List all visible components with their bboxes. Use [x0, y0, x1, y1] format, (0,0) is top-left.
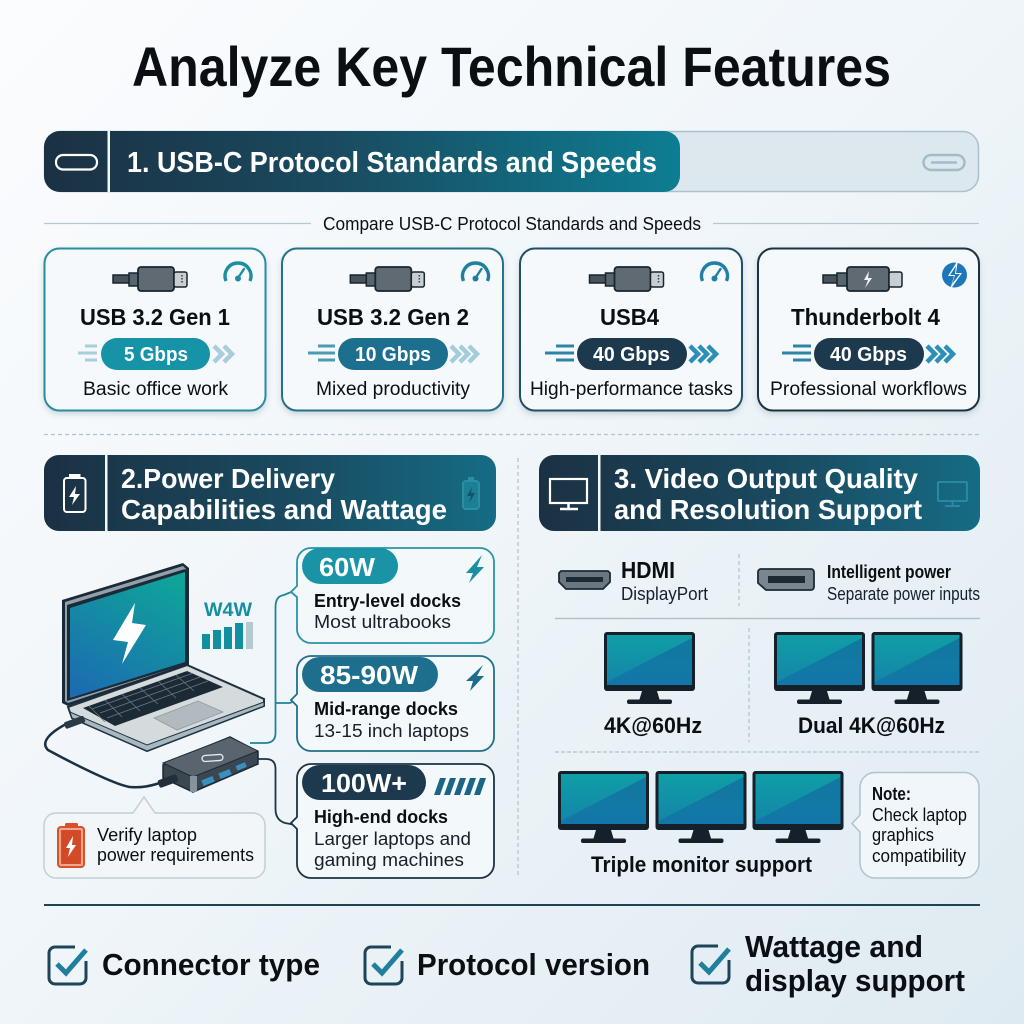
wattage text: gaming machines — [314, 850, 464, 870]
section 3 heading text: and Resolution Support — [614, 494, 922, 525]
wattage text: Most ultrabooks — [314, 612, 451, 632]
wattage card: 60W — [291, 548, 494, 643]
card title: Thunderbolt 4 — [791, 304, 940, 330]
icon: faint monitor — [938, 482, 967, 506]
wattage text: Larger laptops and — [314, 829, 471, 849]
checklist: protocol version: Protocol version — [417, 947, 650, 982]
wattage text: High-end docks — [314, 807, 448, 827]
section 3 heading text: 3. Video Output Quality — [614, 463, 918, 494]
icon: bolt — [466, 665, 484, 691]
note callout — [852, 772, 979, 878]
port row: DisplayPort — [758, 562, 980, 604]
icon: faint USB-C port — [924, 155, 964, 170]
wattage pill — [302, 765, 426, 800]
wattage card: 100W+: 100W+ — [321, 768, 407, 798]
callout text: power requirements — [97, 845, 254, 865]
dock and cable — [45, 715, 258, 792]
W4W label and signal bars: W4W — [204, 600, 252, 621]
card description: High-performance tasks — [530, 379, 733, 400]
icon: thunderbolt connector — [823, 267, 902, 291]
icon: faint battery — [463, 478, 479, 509]
HDMI label: HDMI — [621, 557, 675, 583]
display option: triple monitors: Triple monitor support — [591, 852, 813, 877]
card: USB 3.2 Gen 2 — [282, 248, 503, 410]
card description: Professional workflows — [770, 379, 967, 400]
section 1 heading text: 1. USB-C Protocol Standards and Speeds — [127, 147, 657, 179]
wattage text: Mid-range docks — [314, 699, 458, 719]
section 2 header — [44, 455, 496, 531]
card: Thunderbolt 4 — [758, 248, 979, 410]
checklist: wattage and display support: display support — [745, 963, 965, 998]
note callout: graphics — [872, 825, 934, 845]
speed pill: 40 Gbps — [593, 344, 670, 366]
speed pill — [78, 338, 232, 370]
connector lines — [250, 590, 296, 825]
icon: red battery — [58, 823, 84, 867]
laptop illustration — [62, 563, 264, 751]
card description: Mixed productivity — [316, 379, 470, 400]
note callout: Note: — [872, 784, 911, 804]
subtitle with rules: Compare USB-C Protocol Standards and Speeds — [323, 214, 701, 234]
icon: connector — [590, 267, 664, 291]
intelligent power label: Separate power inputs — [827, 584, 980, 604]
display option: Dual 4K@60Hz: Dual 4K@60Hz — [798, 713, 945, 738]
wattage text: Entry-level docks — [314, 591, 461, 611]
wattage card: 85-90W: 85-90W — [320, 660, 418, 690]
card description: Basic office work — [83, 379, 229, 400]
intelligent power label: Intelligent power — [827, 562, 951, 582]
speed pill — [545, 338, 716, 370]
wattage pill — [302, 657, 438, 692]
icon: DisplayPort — [758, 569, 814, 590]
card title: USB 3.2 Gen 2 — [317, 304, 469, 330]
icon: gauge — [462, 263, 488, 282]
checklist: connector type: Connector type — [102, 947, 320, 982]
icon: connector — [113, 267, 187, 291]
wattage card: 60W: 60W — [319, 552, 375, 582]
wattage text: 13-15 inch laptops — [314, 721, 469, 741]
note callout: Check laptop — [872, 805, 967, 825]
icon: battery — [64, 476, 86, 512]
display option: 4K@60Hz — [604, 632, 702, 738]
speed pill: 40 Gbps — [830, 344, 907, 366]
display option: triple monitors — [558, 771, 844, 877]
HDMI label: DisplayPort — [621, 584, 708, 604]
icon: HDMI port — [559, 571, 610, 589]
card title: USB4 — [600, 304, 659, 330]
wattage card: 100W+ — [291, 764, 494, 878]
section 2 heading text: Capabilities and Wattage — [121, 494, 447, 525]
checklist: wattage and display support: Wattage and — [745, 929, 923, 964]
callout text: Verify laptop — [97, 825, 197, 845]
title: Analyze Key Technical Features — [132, 35, 891, 98]
checklist: wattage and display support — [692, 929, 965, 998]
card title: USB 3.2 Gen 1 — [80, 304, 230, 330]
icon: gauge — [702, 263, 728, 282]
speed pill — [782, 338, 953, 370]
section 3 header — [539, 455, 980, 531]
port row: HDMI — [559, 557, 708, 604]
wattage pill — [302, 548, 398, 584]
speed pill: 10 Gbps — [355, 344, 431, 366]
section 1 header — [44, 131, 978, 192]
section 2 heading text: 2.Power Delivery — [121, 463, 335, 494]
speed pill: 5 Gbps — [124, 344, 188, 366]
card: USB4 — [520, 248, 742, 410]
display option: Dual 4K@60Hz — [774, 632, 962, 738]
note callout: compatibility — [872, 846, 966, 866]
speed pill — [308, 338, 477, 370]
callout: verify power — [44, 797, 265, 878]
icon: monitor — [550, 479, 587, 509]
icon: gauge — [225, 263, 251, 282]
icon: thunderbolt badge — [942, 260, 967, 290]
icon: USB-C port — [56, 155, 97, 170]
icon: bolt — [466, 555, 484, 583]
display option: 4K@60Hz: 4K@60Hz — [604, 713, 702, 738]
card: USB 3.2 Gen 1 — [44, 248, 266, 410]
icon: slanted power bars — [434, 778, 486, 795]
icon: connector — [350, 267, 424, 291]
W4W label and signal bars — [202, 600, 253, 649]
wattage card: 85-90W — [291, 656, 494, 751]
